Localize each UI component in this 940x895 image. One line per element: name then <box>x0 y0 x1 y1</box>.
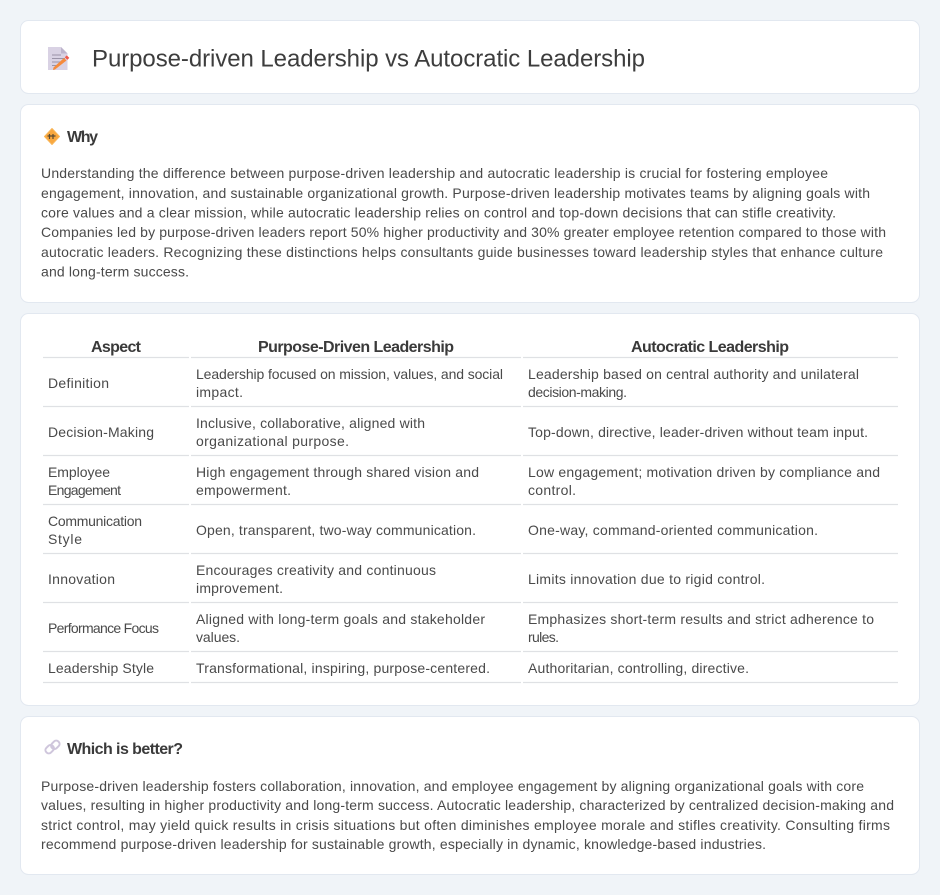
table row: definition: Leadership focused on mission, values, and social <box>196 366 503 382</box>
table row: definition: Leadership based on central authority and unilateral <box>528 366 859 382</box>
table row: communication style: Open, transparent, two-way communication. <box>196 522 476 538</box>
table row: decision-making: Inclusive, collaborative, aligned with <box>196 415 425 431</box>
icon: chain link <box>44 739 61 755</box>
table row: employee engagement: empowerment. <box>196 482 291 498</box>
table row: innovation <box>48 562 765 596</box>
table row: decision-making: Top-down, directive, leader-driven without team input. <box>528 424 868 440</box>
table row: communication style <box>48 513 818 547</box>
text block: verdict: Purpose-driven leadership fosters collaboration, innovation, and employee engagement by aligning organizational goals with core <box>41 778 864 794</box>
table row: definition: decision-making. <box>528 384 627 400</box>
table row: performance focus: values. <box>196 629 240 645</box>
table header row: Aspect <box>91 339 142 356</box>
icon: document with pencil <box>48 47 69 70</box>
table row: leadership style: Authoritarian, controlling, directive. <box>528 660 749 676</box>
table row: decision-making: Decision-Making <box>48 424 154 440</box>
table row: innovation: Encourages creativity and continuous <box>196 562 436 578</box>
table row: performance focus: rules. <box>528 629 559 645</box>
table header row: Purpose-Driven Leadership <box>258 339 454 356</box>
text block: verdict: values, resulting in higher productivity and long-term success. Autocratic leadership, characterized by centralized decision-making and <box>41 797 894 813</box>
text block: why explanation: core values and a clear mission, while autocratic leadership relies on control and top-down decisions that can stifle creativity. <box>41 204 836 220</box>
table row: leadership style <box>48 660 749 676</box>
text block: why explanation: and long-term success. <box>41 264 189 280</box>
text block: why explanation: Understanding the difference between purpose-driven leadership and autocratic leadership is crucial for fostering employee <box>41 165 828 181</box>
table header row <box>91 339 789 356</box>
heading: which is better: Which is better? <box>67 741 183 758</box>
table row: definition <box>48 366 859 400</box>
table row: employee engagement: control. <box>528 482 576 498</box>
panel: comparison table <box>20 314 920 706</box>
text block: why explanation <box>41 165 886 280</box>
text block: verdict <box>41 778 894 852</box>
table row: performance focus: Performance Focus <box>48 620 159 636</box>
table row: employee engagement: Engagement <box>48 482 121 498</box>
icon: warning diamond <box>44 128 60 144</box>
table row: decision-making: organizational purpose. <box>196 433 349 449</box>
text block: why explanation: Companies led by purpose-driven leaders report 50% higher productivity and 30% greater employee retention compared to those with <box>41 224 886 240</box>
table row: communication style: One-way, command-oriented communication. <box>528 522 818 538</box>
panel: which is better <box>20 716 920 874</box>
table row: leadership style: Transformational, inspiring, purpose-centered. <box>196 660 490 676</box>
table row: employee engagement: Low engagement; motivation driven by compliance and <box>528 464 880 480</box>
table row: innovation: Innovation <box>48 571 115 587</box>
panel: why <box>20 104 920 302</box>
table row: decision-making <box>48 415 868 449</box>
table row: performance focus <box>48 611 874 645</box>
table row: leadership style: Leadership Style <box>48 660 154 676</box>
text block: why explanation: autocratic leaders. Recognizing these distinctions helps consultants guide businesses toward leadership styles that enhance culture <box>41 244 883 260</box>
table row: definition: impact. <box>196 384 243 400</box>
text block: why explanation: engagement, innovation, and sustainable organizational growth. Purpose-driven leadership motivates teams by aligning goals with <box>41 185 870 201</box>
table row: employee engagement: High engagement through shared vision and <box>196 464 479 480</box>
table row: performance focus: Aligned with long-term goals and stakeholder <box>196 611 485 627</box>
table row: performance focus: Emphasizes short-term results and strict adherence to <box>528 611 874 627</box>
heading: why: Why <box>67 129 98 146</box>
table header row: Autocratic Leadership <box>631 339 789 356</box>
table row: definition: Definition <box>48 375 109 391</box>
text block: verdict: recommend purpose-driven leadership for sustainable growth, especially in dynamic, knowledge-based industries. <box>41 836 766 852</box>
text block: verdict: strict control, may yield quick results in crisis situations but often diminishes employee morale and stifles creativity. Consulting firms <box>41 817 890 833</box>
title: Purpose-driven Leadership vs Autocratic Leadership <box>92 46 645 72</box>
table row: communication style: Style <box>48 531 82 547</box>
table row: innovation: improvement. <box>196 580 283 596</box>
table row: innovation: Limits innovation due to rigid control. <box>528 571 765 587</box>
table row: employee engagement <box>48 464 880 498</box>
table row: employee engagement: Employee <box>48 464 110 480</box>
table row: communication style: Communication <box>48 513 142 529</box>
panel: title header <box>20 20 920 94</box>
